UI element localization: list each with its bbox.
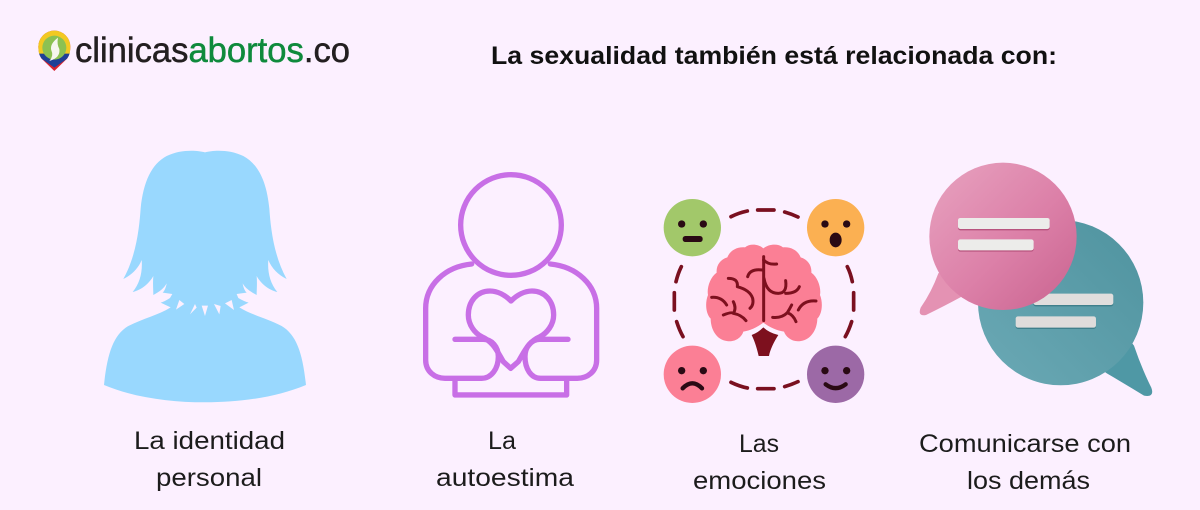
label: emociones: Las (739, 430, 779, 458)
face: happy (807, 346, 864, 403)
label: comunicarse (919, 430, 1131, 495)
brain (706, 245, 822, 356)
title: La sexualidad también está relacionada con: (491, 42, 1057, 70)
label: identidad personal: La identidad (134, 427, 285, 455)
label: identidad personal: personal (156, 464, 262, 492)
icon: person hugging heart (426, 175, 597, 395)
icon: location pin (38, 31, 70, 71)
label: emociones (693, 430, 826, 495)
teal bubble (978, 220, 1152, 396)
dashed ring (674, 210, 854, 389)
logo (38, 31, 350, 71)
logo wordmark: clinicasabortos.co (75, 31, 350, 70)
icon: woman silhouette (104, 151, 306, 402)
icon: brain with emotions (664, 199, 864, 403)
face: surprised (807, 199, 864, 256)
pink bubble (920, 163, 1077, 315)
label: comunicarse: Comunicarse con (919, 430, 1131, 458)
face: sad (664, 346, 721, 403)
icon: speech bubbles (920, 163, 1152, 396)
label: comunicarse: los demás (967, 467, 1090, 495)
label: identidad personal (134, 427, 285, 492)
label: emociones: emociones (693, 467, 826, 495)
face: neutral (664, 199, 721, 256)
label: autoestima: La (488, 427, 516, 455)
label: autoestima: autoestima (436, 464, 574, 492)
label: autoestima (436, 427, 574, 492)
